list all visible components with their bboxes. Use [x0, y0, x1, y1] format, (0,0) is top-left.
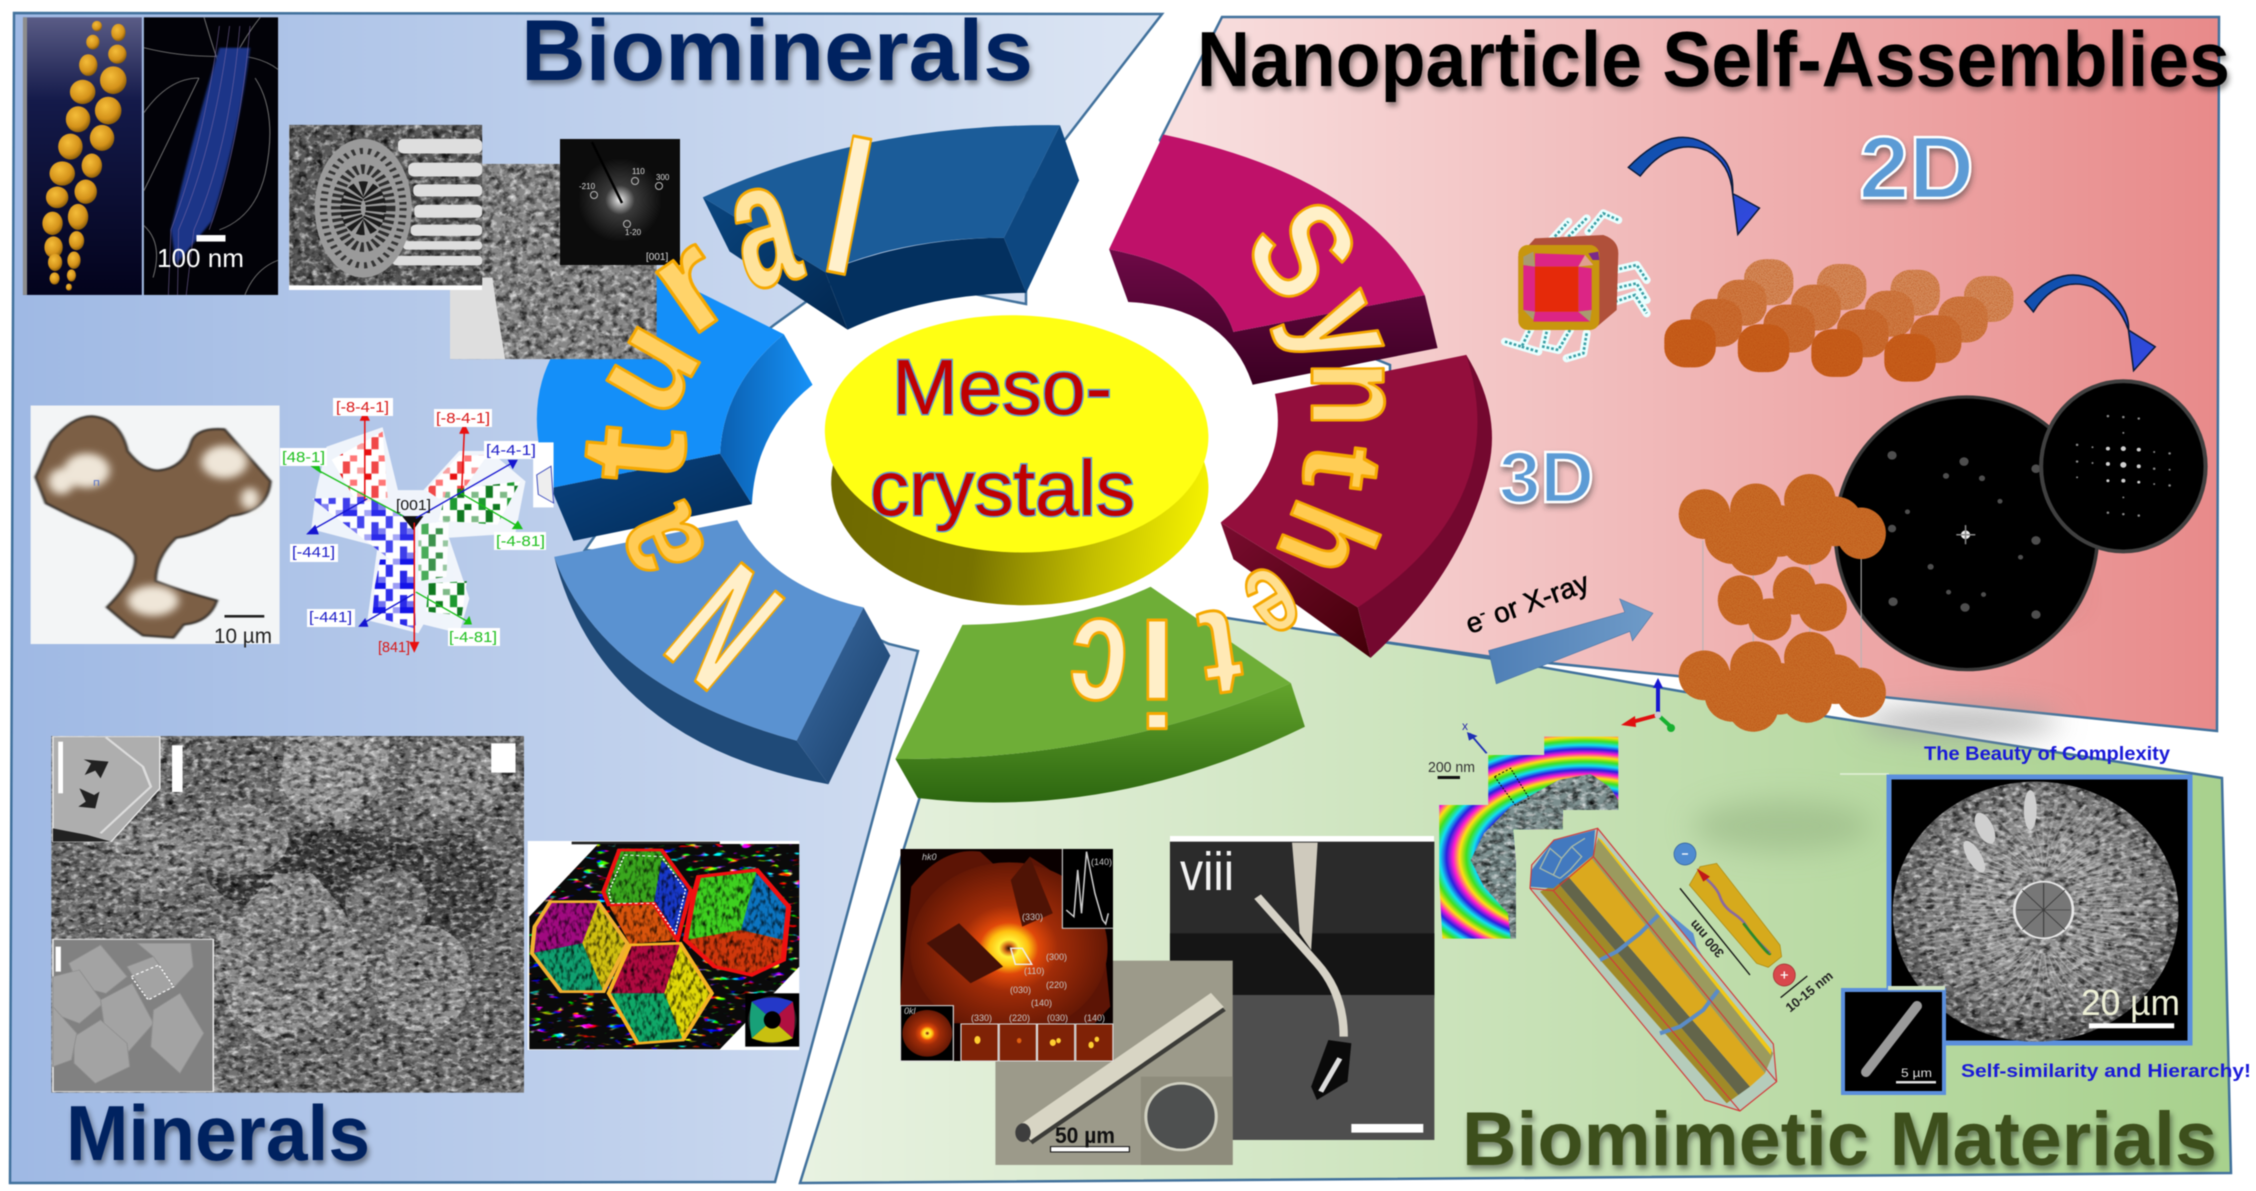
chart: diffraction circle small: [2041, 381, 2206, 551]
curved word: Synthetic: h: [1250, 484, 1404, 597]
label: 50 µm: 50 µm: [1055, 1123, 1115, 1148]
image: gold nanoparticle chains and magnetic contour map: [23, 17, 278, 295]
labels: reflection indices: (330): [971, 1013, 992, 1023]
inset: crystal with arrows: [53, 737, 160, 842]
image: electron diffraction pattern: [560, 139, 680, 265]
label: The Beauty of Complexity: The Beauty of Complexity: [1924, 744, 2170, 765]
image: spherulite SEM, The Beauty of Complexity: [1840, 774, 2190, 1043]
heading: Minerals: Minerals: [66, 1089, 370, 1177]
curved word: Synthetic: n: [1283, 361, 1435, 427]
labels: reflection indices: (140): [1091, 857, 1112, 867]
label: Meso-crystals: crystals: [870, 444, 1135, 532]
label: 20 µm: 20 µm: [2081, 982, 2180, 1023]
label: Meso-crystals: [870, 343, 1135, 532]
labels: reflection indices: (110): [1024, 966, 1044, 976]
curved word: Synthetic: t: [1279, 438, 1407, 496]
label: 5 µm: 5 µm: [1901, 1066, 1932, 1080]
labels: reflection indices: (300): [1046, 952, 1067, 962]
label: electron or X-ray: -: [1476, 603, 1488, 623]
hexagon: centre: [609, 903, 678, 944]
image: X-ray diffraction map: [901, 849, 1113, 1061]
central disc: [811, 304, 1222, 617]
curved word: Synthetic: S: [1216, 172, 1390, 327]
label: 2D: 2D: [1859, 118, 1974, 217]
image: electron diffraction pattern: 110: [632, 167, 645, 176]
image: SEM of single rod: [995, 961, 1233, 1165]
image: SEM of porous fibre bundle: [289, 125, 482, 290]
labels: reflection indices: [904, 852, 1112, 1023]
ring of six segments: [537, 125, 1492, 802]
labels: crystal directions: [48-1]: [282, 449, 325, 466]
image: trident shaped crystal: [31, 406, 280, 644]
illustration: 3D nanoparticle superlattice: [1679, 474, 1886, 732]
labels: crystal directions: [001]: [396, 497, 431, 514]
curved word: Synthetic: t: [1192, 582, 1250, 726]
segment: green synthetic: [895, 587, 1305, 802]
image: TEM of textured fibre: [450, 164, 657, 359]
label: 10-15 nm: 10-15 nm: [1783, 968, 1836, 1015]
image: electron diffraction pattern: -210: [579, 182, 596, 191]
illustration: 2D nanoparticle monolayer: [1664, 259, 2013, 382]
curved word: Synthetic: i: [1138, 587, 1176, 755]
image: SEM of mineral spheres with insets: [51, 736, 524, 1093]
labels: reflection indices: hk0: [922, 852, 937, 862]
labels: crystal directions: [841]: [378, 639, 410, 656]
shadow under the assemblies: [1692, 577, 2075, 852]
curved word: Natural: t: [547, 419, 718, 489]
segment: maroon synthetic: [1221, 355, 1492, 658]
curved word: Natural: a: [571, 488, 734, 601]
label: viii: viii: [1180, 842, 1234, 902]
curved word: Synthetic: [1060, 172, 1435, 757]
image: hexagonal nanorod bundle model: [1530, 828, 1807, 1111]
labels: crystal directions: [-8-4-1]: [436, 410, 490, 427]
heading: Biominerals: Biominerals: [521, 3, 1033, 99]
segment: dark blue natural: [703, 125, 1079, 330]
labels: crystal directions: [4-4-1]: [486, 442, 536, 459]
segment: crimson synthetic: [1109, 134, 1438, 385]
labels: reflection indices: (220): [1046, 980, 1067, 990]
curved word: Natural: [547, 101, 887, 724]
labels: reflection indices: (140): [1031, 998, 1052, 1008]
curved word: Natural: r: [619, 201, 757, 363]
curved word: Synthetic: c: [1060, 585, 1135, 757]
label: 10 µm: 10 µm: [214, 625, 272, 648]
labels: reflection indices: (330): [1022, 912, 1043, 922]
icon: small rod with charge circles: [1674, 843, 1807, 998]
image: SEM of viii fibre with tip: [1170, 836, 1434, 1140]
heading: Biomimetic Materials: Biomimetic Materials: [1462, 1097, 2217, 1182]
segment: bright blue natural: [537, 268, 813, 541]
label: electron or X-ray: e: [1461, 605, 1487, 640]
curved word: Natural: N: [634, 530, 813, 724]
labels: reflection indices: (030): [1047, 1013, 1068, 1023]
image: rainbow holography fringes: [1438, 732, 1618, 939]
image: rainbow orientation map with hexagons: [528, 841, 799, 1050]
labels: crystal directions: [-4-81]: [496, 533, 545, 550]
curved word: Synthetic: y: [1267, 268, 1431, 384]
arrow: curved blue arrow to diffraction circle: [2025, 275, 2155, 371]
arrow: electron or X-ray beam: [1489, 599, 1653, 684]
label: x axis: x: [1462, 719, 1468, 733]
curved word: Natural: a: [706, 120, 817, 329]
icon: ligand capped nanoparticle: [1505, 213, 1647, 358]
labels: reflection indices: (220): [1009, 1013, 1030, 1023]
icon: xyz axis triad: [1621, 678, 1675, 732]
hexagon: right: [685, 870, 789, 975]
label: 200 nm: 200 nm: [1428, 759, 1475, 776]
image: electron diffraction pattern: [001]: [646, 252, 668, 263]
labels: reflection indices: (030): [1010, 985, 1031, 995]
labels: reflection indices: (140): [1084, 1013, 1105, 1023]
panel: biominerals and minerals background: [10, 13, 1162, 1183]
image: inset rod, 5 µm: [1843, 988, 1945, 1093]
labels: crystal directions: [280, 398, 546, 656]
labels: crystal directions: [-441]: [292, 544, 335, 561]
label: 3D: 3D: [1499, 438, 1594, 518]
labels: crystal directions: [-441]: [309, 609, 352, 626]
segment: medium blue natural: [554, 520, 890, 784]
curved word: Natural: u: [559, 294, 729, 437]
arrow: curved blue arrow to 2D assembly: [1628, 137, 1759, 234]
legend: colour wheel: [745, 993, 799, 1047]
chart: diffraction circle large: [1836, 397, 2098, 670]
label: electron or X-ray: or X-ray: [1481, 567, 1593, 632]
panel: nanoparticle self-assemblies background: [1160, 17, 2219, 731]
chart: pole figure with crystal directions: [280, 398, 554, 656]
labels: crystal directions: [-8-4-1]: [336, 399, 389, 416]
label: 300 nm: 300 nm: [1686, 917, 1727, 961]
label: 100 nm: 100 nm: [157, 243, 244, 273]
inset: rhombohedral crystals: [53, 939, 213, 1092]
image: electron diffraction pattern: 1-20: [625, 228, 642, 237]
panel: biomimetic materials background: [800, 614, 2231, 1183]
curved word: Synthetic: e: [1223, 539, 1331, 676]
label: Self-similarity and Hierarchy: Self-similarity and Hierarchy!: [1961, 1061, 2251, 1081]
image: electron diffraction pattern: 300: [656, 173, 670, 182]
labels: crystal directions: [-4-81]: [449, 629, 497, 646]
hexagon outlines: [532, 850, 789, 1043]
curved word: Natural: l: [810, 101, 887, 316]
label: Meso-crystals: Meso-: [892, 343, 1112, 431]
hexagon: upper: [603, 850, 691, 940]
labels: reflection indices: 0kl: [904, 1006, 917, 1016]
hexagon: lower: [609, 943, 712, 1043]
hexagon: left: [532, 902, 627, 992]
